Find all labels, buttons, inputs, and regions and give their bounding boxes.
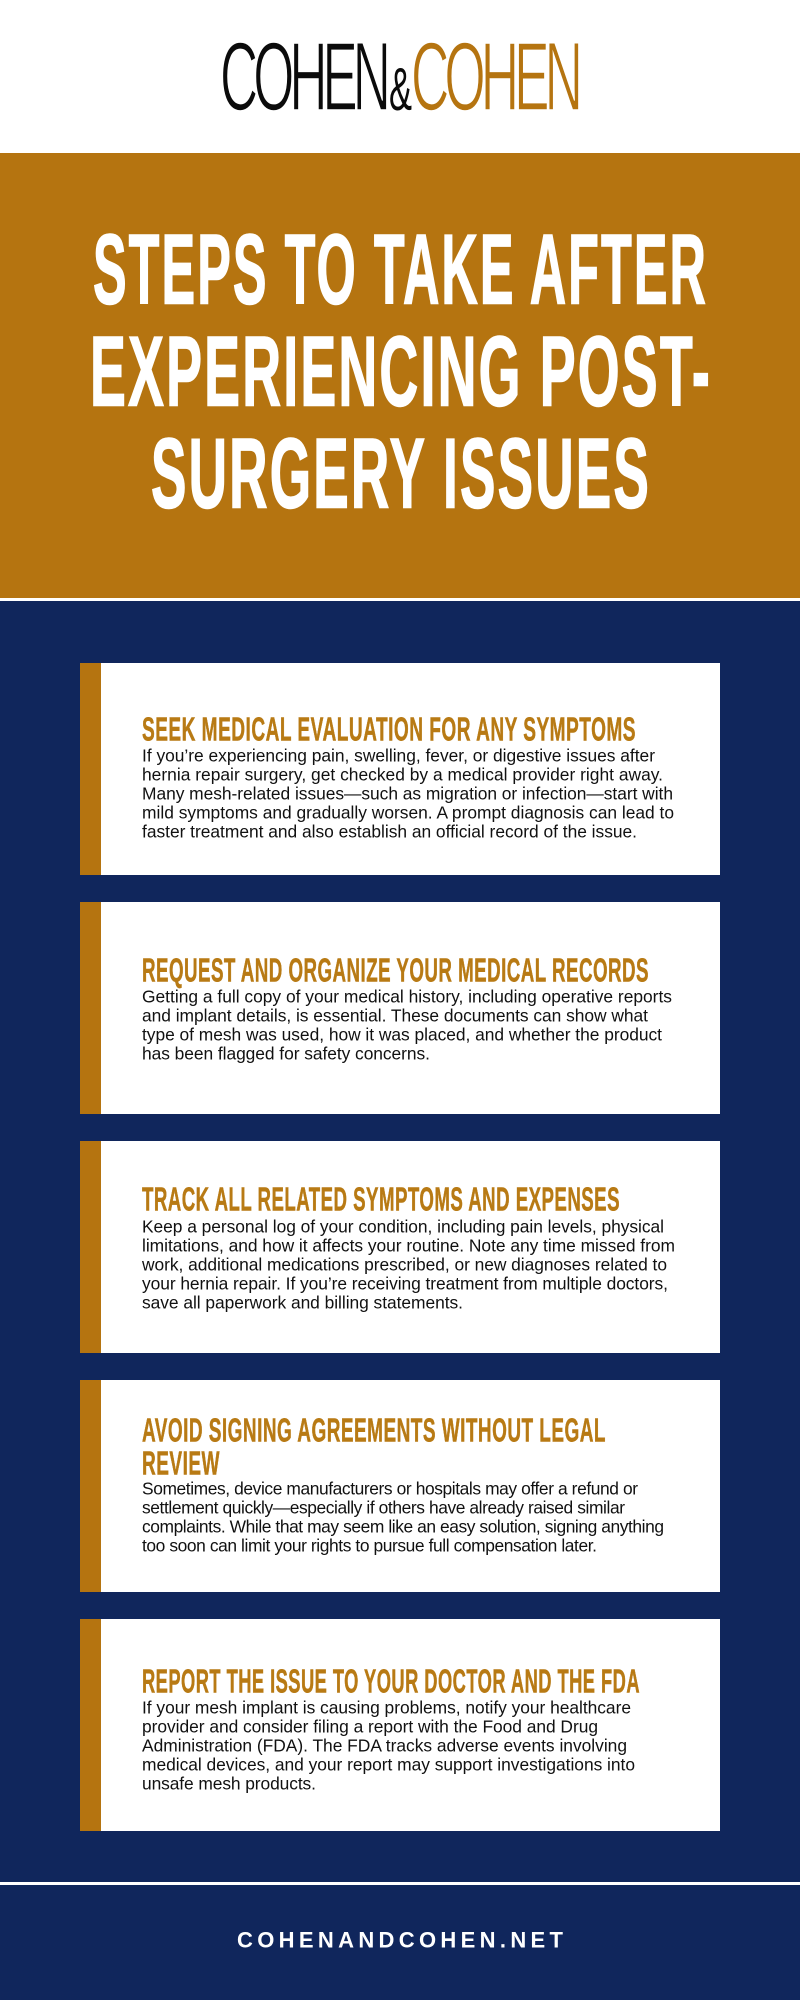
panel: track symptoms and expenses: work, additional medications prescribed, or new diagnoses related to bbox=[141, 1254, 667, 1274]
panel: avoid signing agreements: REVIEW bbox=[142, 1444, 220, 1482]
panel: request medical records bbox=[80, 902, 720, 1114]
panel: report the issue: provider and consider filing a report with the Food and Drug bbox=[142, 1716, 598, 1736]
panel: avoid signing agreements: complaints. While that may seem like an easy solution, signing anything bbox=[142, 1516, 664, 1536]
panel: avoid signing agreements bbox=[80, 1380, 720, 1592]
panel: avoid signing agreements: Sometimes, device manufacturers or hospitals may offer a refund or bbox=[142, 1478, 638, 1498]
panel: seek medical evaluation: If you’re experiencing pain, swelling, fever, or digestive issues after bbox=[142, 746, 655, 766]
logo: COHEN bbox=[220, 22, 387, 131]
footer: COHENANDCOHEN.NET bbox=[237, 1928, 564, 1952]
panel: request medical records: Getting a full copy of your medical history, including operative reports bbox=[142, 986, 672, 1006]
panel: avoid signing agreements: too soon can limit your rights to pursue full compensation later. bbox=[142, 1536, 597, 1556]
panel: track symptoms and expenses: Keep a personal log of your condition, including pain levels, physical bbox=[142, 1216, 664, 1236]
panel: seek medical evaluation: hernia repair surgery, get checked by a medical provider right away. bbox=[142, 764, 663, 784]
panel: report the issue: medical devices, and your report may support investigations into bbox=[142, 1754, 635, 1774]
panel: seek medical evaluation: mild symptoms and gradually worsen. A prompt diagnosis can lead to bbox=[142, 802, 674, 822]
panel: avoid signing agreements: settlement quickly—especially if others have already raised similar bbox=[142, 1498, 625, 1518]
logo: & bbox=[389, 56, 412, 123]
panel: seek medical evaluation: faster treatment and also establish an official record of the issue. bbox=[142, 822, 637, 842]
panel: request medical records: has been flagged for safety concerns. bbox=[142, 1044, 430, 1064]
panel: track symptoms and expenses bbox=[80, 1141, 720, 1353]
title banner bbox=[0, 153, 800, 601]
panel: report the issue: If your mesh implant is causing problems, notify your healthcare bbox=[142, 1698, 631, 1718]
panel: report the issue: unsafe mesh products. bbox=[142, 1774, 316, 1794]
panel: track symptoms and expenses: save all paperwork and billing statements. bbox=[142, 1292, 463, 1312]
panel: request medical records: type of mesh was used, how it was placed, and whether the product bbox=[142, 1024, 662, 1044]
panel: seek medical evaluation bbox=[80, 663, 720, 875]
panel: report the issue bbox=[80, 1619, 720, 1831]
logo: COHEN bbox=[411, 22, 579, 131]
footer bbox=[0, 1882, 800, 1952]
panel: seek medical evaluation: Many mesh-related issues—such as migration or infection—start with bbox=[142, 784, 673, 804]
panel: track symptoms and expenses: limitations, and how it affects your routine. Note any time missed from bbox=[142, 1236, 675, 1256]
logo bbox=[0, 0, 800, 153]
panel: report the issue: Administration (FDA). The FDA tracks adverse events involving bbox=[142, 1736, 627, 1756]
panel: track symptoms and expenses: your hernia repair. If you’re receiving treatment from multiple doctors, bbox=[142, 1274, 668, 1294]
panel: request medical records: and implant details, is essential. These documents can show what bbox=[142, 1006, 648, 1026]
